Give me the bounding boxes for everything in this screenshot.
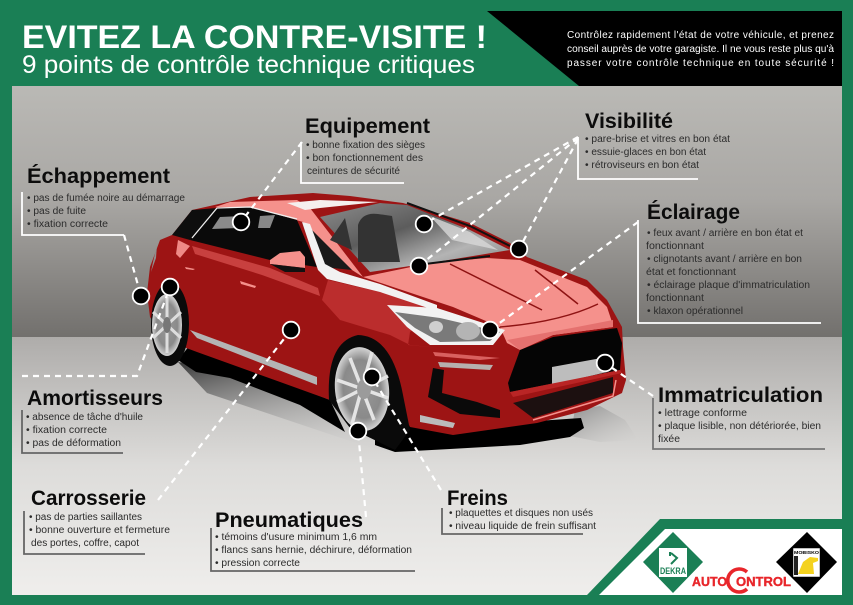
callout: Freins: • plaquettes et disques non usés	[449, 508, 593, 519]
callout: Pneumatiques	[211, 509, 415, 571]
callout: Carrosserie: Carrosserie	[31, 487, 146, 510]
title: EVITEZ LA CONTRE-VISITE !	[22, 19, 487, 55]
bumper lip	[510, 370, 622, 397]
panel: backdrop wall	[12, 86, 842, 337]
callout: Échappement: Échappement	[27, 165, 170, 188]
callout: Carrosserie: • pas de parties saillantes	[29, 512, 142, 523]
callout: Carrosserie: • bonne ouverture et fermeture	[29, 525, 170, 536]
callout: Visibilité: • pare-brise et vitres en bon état	[585, 134, 730, 145]
car roof white highlight	[287, 200, 378, 210]
panel: backdrop floor	[12, 337, 842, 595]
callout: Éclairage: • feux avant / arrière en bon état et	[647, 228, 803, 239]
logo: DEKRA: DEKRA	[660, 566, 686, 576]
intro text: conseil auprès de votre garagiste. Il ne vous reste plus qu'à	[567, 44, 834, 55]
callout: Visibilité: • rétroviseurs en bon état	[585, 160, 699, 171]
callout: Échappement: • pas de fuite	[27, 206, 86, 217]
intro text: Contrôlez rapidement l'état de votre véhicule, et prenez	[567, 30, 834, 41]
number plate	[552, 357, 607, 385]
hood front reddish band	[507, 320, 613, 350]
logo: Autocontrol	[692, 569, 791, 592]
callout: Equipement: Equipement	[305, 115, 430, 138]
callout: Pneumatiques: • pression correcte	[215, 558, 300, 569]
logo: Autocontrol: AUTO	[692, 574, 727, 589]
callout: Amortisseurs: • fixation correcte	[26, 425, 107, 436]
car body dark rear pillar	[172, 208, 217, 240]
callout: Éclairage: état et fonctionnant	[646, 267, 736, 278]
intro text: passer votre contrôle technique en toute sécurité !	[567, 58, 834, 69]
side body highlights	[322, 280, 440, 348]
subtitle: 9 points de contrôle technique critiques	[22, 51, 475, 79]
door side sill trim	[190, 330, 317, 385]
callout: Éclairage: • klaxon opérationnel	[647, 306, 743, 317]
callout: Échappement	[22, 165, 185, 235]
callout: Freins: Freins	[447, 487, 508, 510]
callout dots	[133, 214, 613, 439]
callout: Freins: • niveau liquide de frein suffisant	[449, 521, 596, 532]
front grille	[508, 328, 622, 392]
intro text	[567, 30, 834, 69]
windshield	[320, 203, 510, 272]
callout: Immatriculation: Immatriculation	[658, 384, 823, 407]
window trim	[192, 207, 297, 238]
car ground shadow	[178, 362, 400, 456]
logo: Autocontrol: ONTROL	[736, 574, 791, 589]
door handles	[240, 281, 256, 288]
callout: Visibilité: • essuie-glaces en bon état	[585, 147, 706, 158]
car underbody shadow	[178, 345, 345, 432]
callout: Pneumatiques: • flancs sans hernie, déchirure, déformation	[215, 545, 412, 556]
callout: Equipement: • bon fonctionnement des	[306, 153, 423, 164]
callout: Visibilité	[578, 110, 730, 179]
header intro box	[487, 11, 842, 86]
fog lamp housing	[428, 368, 500, 418]
wing mirror	[270, 251, 305, 268]
windshield seat silhouettes	[330, 214, 400, 262]
rear wheel	[151, 282, 189, 366]
callout: Freins	[442, 487, 596, 534]
callout: Échappement: • fixation correcte	[27, 219, 108, 230]
callout: Immatriculation: • lettrage conforme	[658, 408, 747, 419]
callout: Carrosserie: des portes, coffre, capot	[31, 538, 139, 549]
callout: Immatriculation	[653, 384, 825, 449]
logo: DEKRA	[643, 532, 703, 593]
callout: Equipement	[301, 115, 430, 183]
callout: Immatriculation: fixée	[658, 434, 680, 445]
callout: Carrosserie	[24, 487, 170, 554]
callout: Éclairage: • clignotants avant / arrière en bon	[647, 254, 802, 265]
hood crease lines	[450, 264, 598, 327]
callout: Immatriculation: • plaque lisible, non détériorée, bien	[658, 421, 821, 432]
car roof and pillar highlight	[215, 200, 363, 277]
callout: Amortisseurs: • absence de tâche d'huile	[26, 412, 143, 423]
callout: Éclairage: fonctionnant	[646, 241, 704, 252]
window reflections	[212, 216, 242, 229]
logo: Mobisko: MOBISKO	[794, 550, 820, 555]
logo: Mobisko	[776, 532, 837, 593]
callout: Éclairage: fonctionnant	[646, 293, 704, 304]
logo corner frame	[587, 519, 842, 595]
callout: Equipement: • bonne fixation des sièges	[306, 140, 425, 151]
callout: Échappement: • pas de fumée noire au démarrage	[27, 193, 185, 204]
callout: Pneumatiques: Pneumatiques	[215, 509, 363, 532]
headlight	[387, 305, 505, 345]
car hood highlight	[363, 258, 613, 350]
daytime light strips	[438, 362, 493, 370]
callout: Amortisseurs	[22, 387, 163, 453]
lower grille	[513, 377, 613, 418]
callout: Equipement: ceintures de sécurité	[307, 166, 400, 177]
callout: Pneumatiques: • témoins d'usure minimum 1,6 mm	[215, 532, 377, 543]
front wheel	[329, 335, 410, 450]
car illustration	[147, 193, 638, 456]
callout: Amortisseurs: • pas de déformation	[26, 438, 121, 449]
side windows	[190, 207, 317, 267]
chrome strip	[302, 222, 437, 311]
callout: Éclairage: Éclairage	[647, 201, 740, 224]
car body	[147, 193, 626, 435]
callout: Amortisseurs: Amortisseurs	[27, 387, 163, 410]
callout: Visibilité: Visibilité	[585, 110, 673, 133]
windshield top edge and wipers	[407, 203, 510, 264]
callout leader lines	[22, 137, 653, 517]
callout: Éclairage: • éclairage plaque d'immatriculation	[647, 280, 810, 291]
car taillight edge	[151, 245, 157, 272]
callout: Éclairage	[638, 201, 821, 323]
logo corner white panel	[599, 529, 842, 595]
